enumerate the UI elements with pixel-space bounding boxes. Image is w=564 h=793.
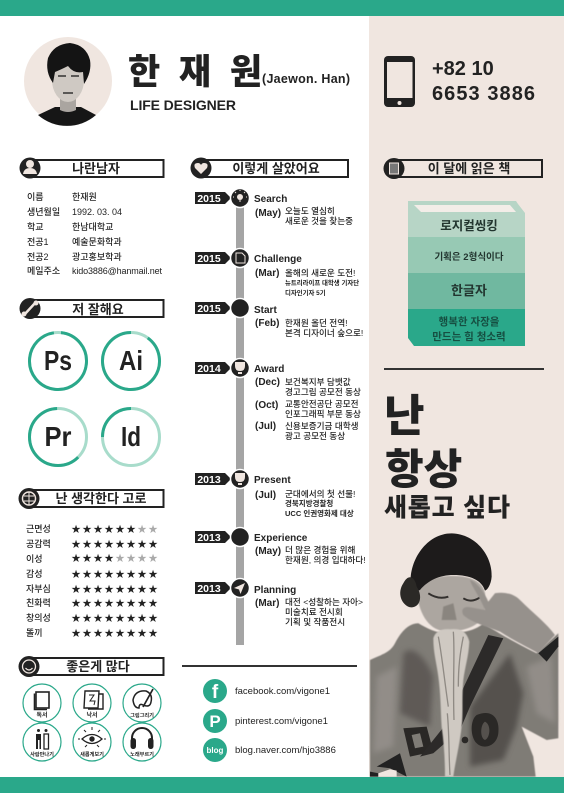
timeline: Award: 교통안전공단 공모전	[285, 398, 359, 409]
social: facebook	[203, 679, 330, 703]
timeline: Award: (Oct)	[255, 400, 278, 411]
hobby: reading: 독서	[36, 711, 48, 719]
phone number: +82 10	[432, 58, 494, 80]
book stack: 기획은 2형식이다	[434, 251, 504, 263]
profile info table: 한남대학교	[72, 221, 113, 232]
divider above slogan	[384, 368, 544, 370]
slogan: 항상	[385, 446, 462, 493]
name title: 한 재 원	[128, 53, 267, 92]
social: pinterest	[203, 709, 328, 733]
rating list: 친화력	[26, 597, 51, 608]
heading: 난 생각한다 고로	[18, 488, 164, 509]
timeline: Planning: Planning	[254, 585, 296, 596]
profile info table: 전공1	[27, 236, 49, 247]
rating list	[26, 522, 158, 640]
profile info table: 이름	[27, 192, 44, 202]
hobby: doodling: 낙서	[86, 711, 98, 719]
profile photo	[24, 37, 112, 126]
timeline: Challenge: Challenge	[254, 254, 302, 265]
timeline: Search: 새로운 것을 찾는중	[285, 216, 353, 226]
profile info table: 1992. 03. 04	[72, 207, 122, 217]
social: facebook: f	[212, 682, 219, 703]
rating list: ★★★★	[115, 551, 158, 565]
timeline: Award: (Dec)	[255, 377, 280, 388]
heading: 이렇게 살았어요	[190, 158, 348, 178]
phone number: 6653 3886	[432, 83, 535, 105]
profile info table: 광고홍보학과	[72, 251, 122, 262]
timeline: Planning: (Mar)	[255, 598, 279, 609]
heading: 이 달에 읽은 책: 이 달에 읽은 책	[428, 161, 510, 176]
heading: 나란남자: 나란남자	[72, 161, 120, 176]
slogan: 난	[384, 392, 424, 441]
timeline: Award: 경고그림 공모전 동상	[285, 386, 361, 397]
profile info table: kido3886@hanmail.net	[72, 266, 162, 276]
rating list: ★★★★★★★★	[71, 596, 158, 610]
social: pinterest: pinterest.com/vigone1	[235, 716, 328, 727]
timeline: Award	[195, 358, 361, 441]
heading: 저 잘해요: 저 잘해요	[72, 302, 124, 317]
social: facebook: facebook.com/vigone1	[235, 686, 330, 697]
timeline: Search: 오늘도 열심히	[285, 205, 335, 216]
job title: LIFE DESIGNER	[130, 97, 236, 113]
timeline: Present: Present	[254, 475, 291, 486]
heading: 좋은게 많다: 좋은게 많다	[66, 659, 130, 674]
timeline: Challenge: (Mar)	[255, 268, 279, 279]
book stack: 만드는 힘 청소력	[432, 330, 506, 343]
rating list: ★★★★★★	[71, 522, 136, 536]
hobby: painting: 그림그리기	[130, 711, 154, 719]
timeline: Award: (Jul)	[255, 421, 276, 432]
timeline: Experience: 더 많은 경험을 위해	[285, 544, 356, 555]
skill: Illustrator: Ai	[119, 345, 143, 376]
divider above social links	[182, 665, 357, 667]
timeline: Experience: 한재원, 의경 입대하다!	[285, 554, 366, 565]
timeline: Present	[195, 470, 355, 518]
rating list: 창의성	[26, 613, 51, 623]
timeline: Start	[195, 298, 363, 338]
timeline: Present: UCC 인권영화제 대상	[285, 508, 354, 518]
hobby: painting	[123, 684, 161, 722]
heading: 저 잘해요	[20, 298, 164, 319]
book stack: 행복한 자장을	[439, 315, 500, 328]
rating list: ★★★★★★★★	[71, 537, 158, 551]
timeline: Award: 광고 공모전 동상	[285, 430, 345, 441]
skill: Photoshop: Ps	[44, 345, 72, 376]
social: blog: blog	[207, 746, 224, 755]
rating list: 근면성	[26, 523, 51, 534]
skill: Photoshop	[27, 330, 89, 392]
rating list: ★★★★★★★★	[71, 626, 158, 640]
timeline: Challenge: 올해의 새로운 도전!	[285, 267, 355, 278]
phone number	[432, 58, 535, 105]
heading: 좋은게 많다	[18, 656, 164, 677]
timeline: Start: 본격 디자이너 숲으로!	[285, 328, 363, 338]
timeline: Present: 군대에서의 첫 선물!	[285, 488, 355, 499]
profile info table: 메일주소	[27, 265, 60, 276]
english name: (Jaewon. Han)	[262, 72, 350, 86]
social: blog: blog.naver.com/hjo3886	[235, 745, 336, 756]
timeline axis	[236, 198, 244, 645]
timeline: Experience	[195, 528, 366, 565]
icon: smartphone	[384, 56, 415, 107]
timeline: Start: 한재원 올던 전역!	[285, 317, 348, 328]
panel: right sidebar background	[369, 16, 564, 777]
rating list: 이성	[26, 554, 43, 564]
profile info table	[27, 191, 162, 276]
rating list: 자부심	[26, 584, 51, 594]
timeline: Start: 2015	[197, 303, 221, 315]
rating list: ★★★★★★★★	[71, 611, 158, 625]
rating list: ★★	[137, 522, 158, 536]
heading: 난 생각한다 고로: 난 생각한다 고로	[56, 491, 147, 506]
timeline: Search	[195, 188, 353, 226]
social: pinterest: P	[209, 712, 221, 731]
timeline: Search: (May)	[255, 208, 281, 219]
rating list: ★★★★★★★★	[71, 567, 158, 581]
book stack	[408, 201, 525, 346]
top teal bar	[0, 0, 564, 16]
timeline: Planning: 대전 <성찰하는 자아>	[285, 596, 363, 607]
timeline: Present: 2013	[197, 474, 221, 486]
profile info table: 예술문화학과	[72, 236, 122, 247]
timeline: Search: Search	[254, 194, 287, 205]
portrait photo	[370, 533, 558, 777]
profile info table: 생년월일	[27, 206, 60, 217]
heading: 나란남자	[20, 158, 164, 178]
timeline: Experience: Experience	[254, 533, 308, 544]
timeline: Award: 신용보증기금 대학생	[285, 420, 359, 431]
hobby: seeing anew	[73, 723, 111, 761]
social: blog	[203, 738, 336, 762]
skill: InDesign	[102, 408, 160, 466]
book stack: 로지컬씽킹	[440, 219, 498, 233]
timeline: Award: 보건복지부 담뱃값	[285, 376, 351, 387]
profile info table: 학교	[27, 221, 44, 232]
timeline: Challenge: 2015	[197, 253, 221, 265]
profile info table: 전공2	[27, 251, 49, 262]
hobby: reading	[23, 684, 61, 722]
heading: 이렇게 살았어요: 이렇게 살았어요	[232, 161, 320, 176]
rating list: ★★★★★★★★	[71, 582, 158, 596]
hobby: singing: 노래부르기	[130, 750, 154, 758]
timeline: Start: (Feb)	[255, 318, 279, 329]
hobby: meeting people	[23, 723, 61, 761]
timeline: Planning: 기획 및 작품전시	[285, 616, 345, 627]
bottom teal bar	[0, 777, 564, 793]
skill: Illustrator	[91, 321, 171, 401]
profile info table: 한재원	[72, 191, 97, 202]
timeline: Challenge: 뉴트리라이프 대학생 기자단	[285, 278, 359, 287]
skill: Premiere: Pr	[44, 421, 72, 452]
timeline: Challenge	[195, 248, 359, 297]
rating list: 공감력	[26, 538, 51, 549]
hobby: seeing anew: 새롭게보기	[80, 750, 104, 758]
timeline: Experience: (May)	[255, 546, 281, 557]
hobby: doodling	[73, 684, 111, 722]
slogan: 새롭고 싶다	[384, 494, 510, 522]
timeline: Planning: 2013	[197, 583, 221, 595]
timeline: Award: 인포그래픽 부문 동상	[285, 409, 361, 419]
timeline: Experience: 2013	[197, 532, 221, 544]
timeline: Present: (Jul)	[255, 490, 276, 501]
rating list: 똘끼	[26, 628, 43, 638]
book stack: 한글자	[451, 283, 487, 298]
timeline: Present: 경북지방경찰청	[285, 498, 333, 508]
timeline: Start: Start	[254, 305, 277, 316]
rating list: ★★★★	[71, 551, 114, 565]
hobby: meeting people: 사람만나기	[30, 750, 54, 758]
skill: InDesign: Id	[121, 421, 141, 452]
skill: Premiere	[18, 397, 98, 477]
timeline: Planning	[195, 578, 363, 627]
timeline: Search: 2015	[197, 193, 221, 205]
timeline: Award: Award	[254, 364, 284, 375]
slogan	[384, 392, 510, 522]
timeline: Planning: 미술치료 전시회	[285, 606, 343, 617]
hobby: singing	[123, 723, 161, 761]
timeline: Award: 2014	[197, 363, 221, 375]
heading: 이 달에 읽은 책	[384, 158, 542, 179]
rating list: 감성	[26, 568, 43, 579]
timeline: Challenge: 디자인기자 5기	[285, 288, 326, 297]
